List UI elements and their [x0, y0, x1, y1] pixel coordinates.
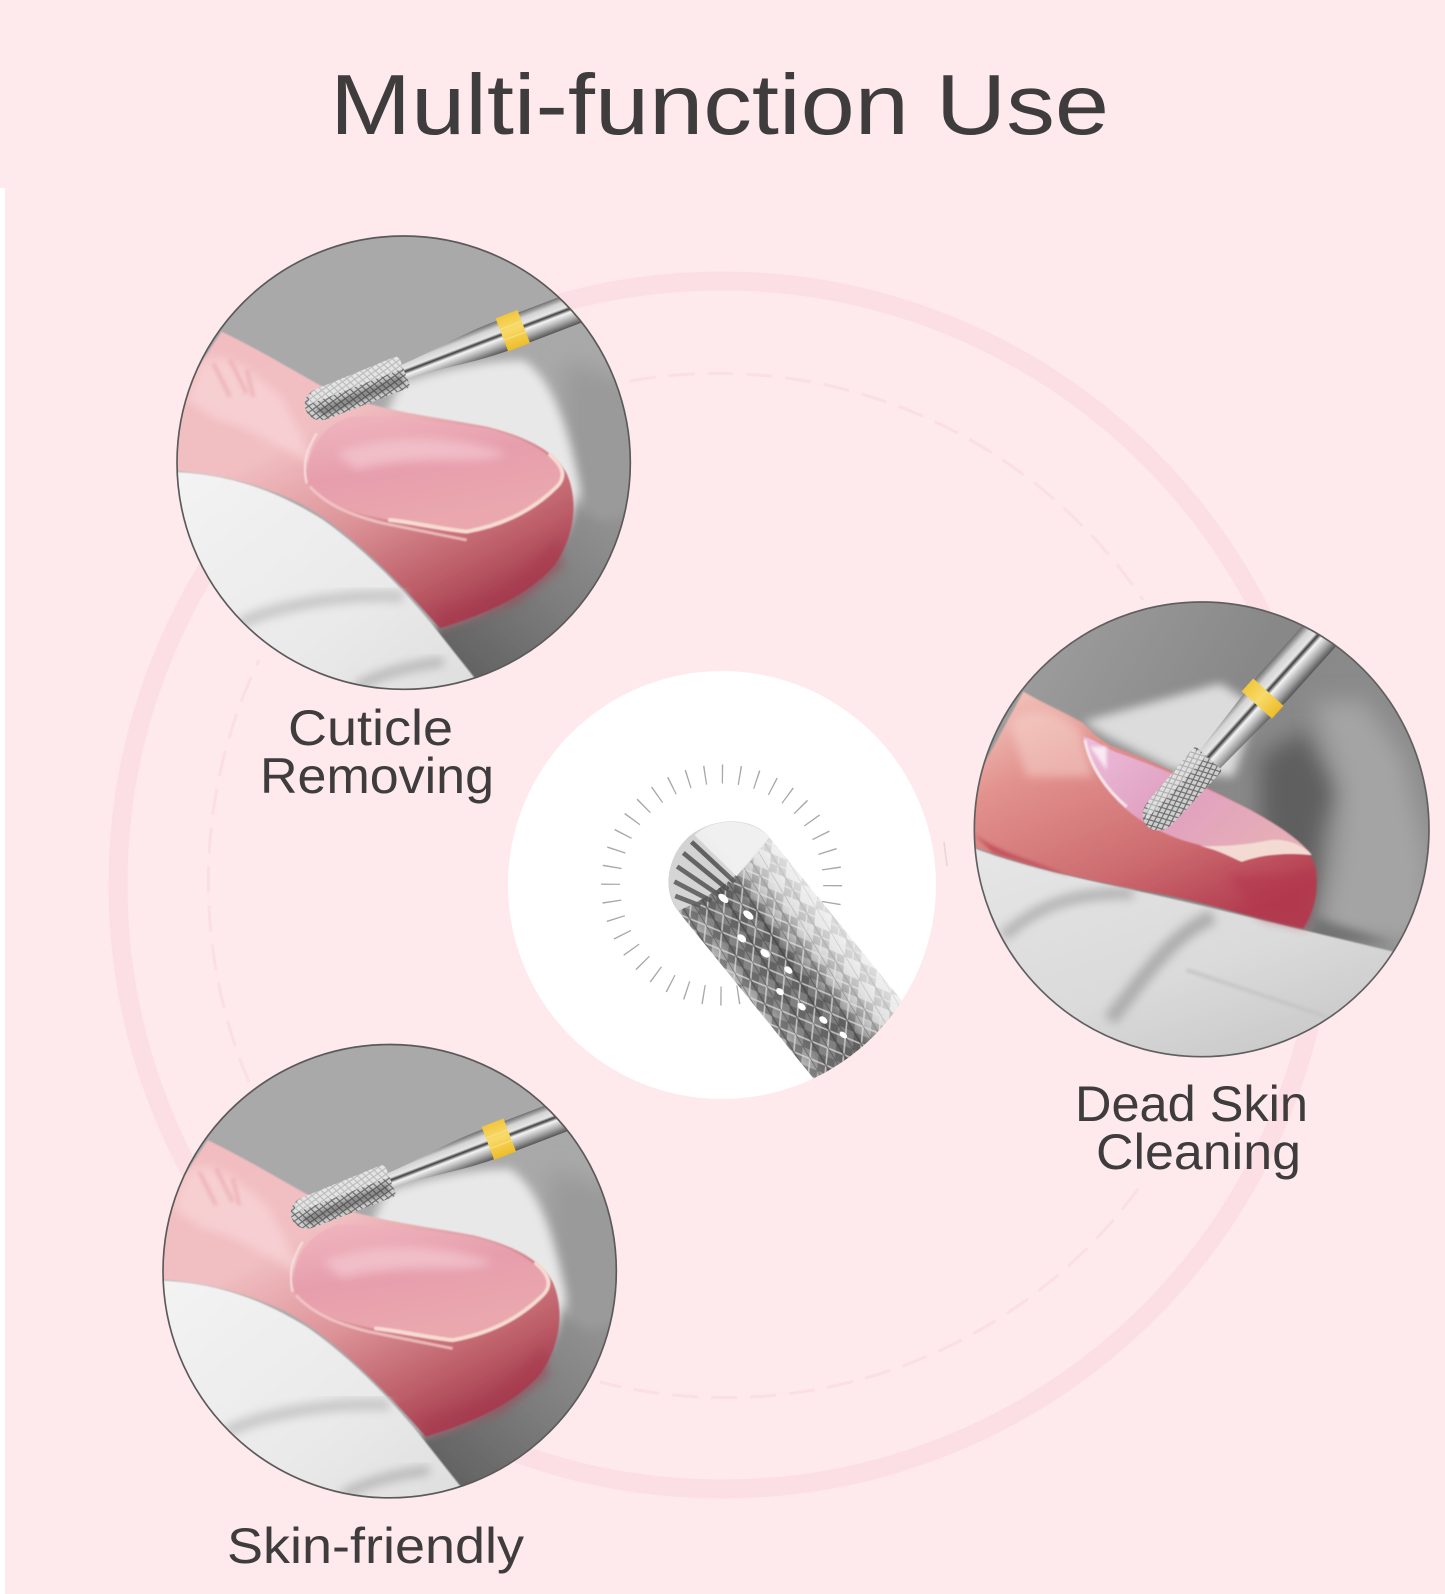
sunburst ticks: [611, 774, 833, 996]
stray tick beside centre disc: [944, 842, 947, 866]
white disc: [508, 671, 936, 1099]
label: dead skin cleaning: [1075, 1076, 1308, 1180]
label: dead skin cleaning: Cleaning: [1096, 1124, 1301, 1180]
dashed inner ring: [208, 373, 1143, 1398]
label: skin-friendly: Skin-friendly: [227, 1518, 524, 1574]
label: cuticle removing: Removing: [260, 748, 494, 804]
icon: carbide burr: [668, 821, 902, 1078]
label: cuticle removing: Cuticle: [288, 700, 453, 756]
panel: dead skin cleaning photo: [974, 601, 1430, 1058]
panel: cuticle removing photo: [150, 220, 657, 727]
label: dead skin cleaning: Dead Skin: [1075, 1076, 1308, 1132]
title: Multi-function Use: [330, 58, 1109, 153]
label: cuticle removing: [260, 700, 494, 804]
centre panel: drill bit close-up: [508, 671, 936, 1099]
large ring: [118, 281, 1326, 1489]
panel: skin-friendly photo: [136, 1028, 643, 1535]
